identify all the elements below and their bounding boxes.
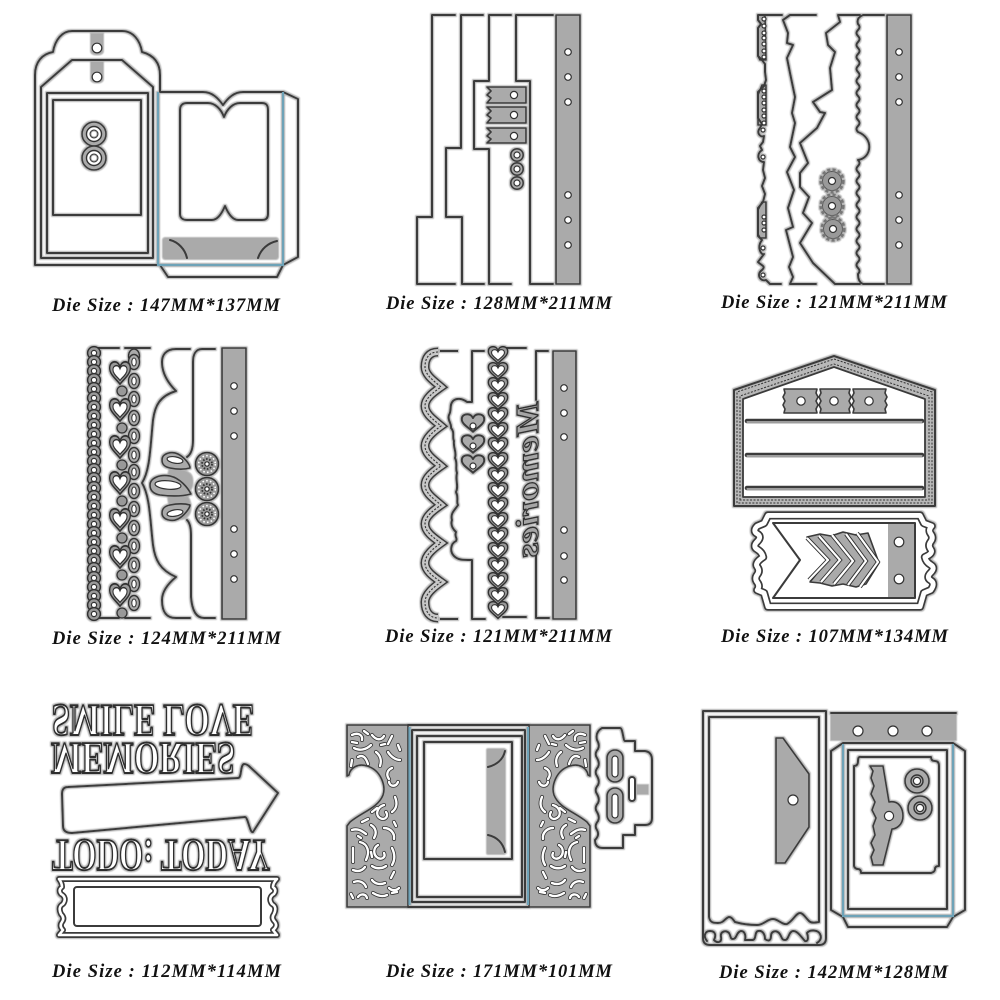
gears <box>821 170 844 240</box>
bead border <box>88 347 119 620</box>
panel: die set 1, tag and envelope <box>35 31 298 277</box>
deep torn strip <box>800 15 860 284</box>
panel: die set 7, mirrored words, arrow, ticket <box>51 695 278 935</box>
curved strip <box>142 349 190 618</box>
tall tag <box>703 711 826 945</box>
left filigree <box>347 725 408 907</box>
teardrop cluster <box>150 453 193 520</box>
chevrons <box>807 532 879 587</box>
caption 8: Die Size : 171MM*101MM <box>385 962 613 982</box>
tag frames <box>47 93 148 253</box>
rings <box>511 149 523 189</box>
stepped strips <box>417 15 455 284</box>
flap hole <box>788 795 798 805</box>
tag outline with envelope body <box>35 31 298 277</box>
caption 5: Die Size : 121MM*211MM <box>384 627 613 647</box>
ring pair <box>82 122 106 170</box>
panel: die set 5, scallops and hearts <box>425 347 576 619</box>
gray tab top <box>91 34 103 54</box>
slot bars <box>747 421 922 489</box>
ticket outline <box>755 515 933 607</box>
wavy strip <box>856 15 884 284</box>
caption 6: Die Size : 107MM*134MM <box>720 627 949 647</box>
heart chain <box>488 347 526 618</box>
gray hearts <box>462 414 484 473</box>
scallop strip <box>425 351 458 619</box>
envelope window <box>180 103 268 220</box>
banner tags <box>487 87 526 143</box>
panel: die set 4, lace strips <box>88 347 246 620</box>
dotted edge strip <box>758 15 782 284</box>
panel: die set 8, filigree gate card <box>347 725 652 907</box>
jagged gray piece <box>870 766 903 865</box>
bumpy strip <box>449 351 485 619</box>
gray strip with holes <box>556 15 580 284</box>
mirrored script word: Memories <box>509 401 545 558</box>
caption 4: Die Size : 124MM*211MM <box>51 629 282 649</box>
ticket <box>59 879 277 935</box>
gray tag flap <box>776 738 809 863</box>
rosettes <box>196 452 218 526</box>
torn strip <box>783 15 816 284</box>
word: memories: MEMORIES <box>51 733 235 783</box>
top strip <box>831 713 956 740</box>
scalloped window <box>854 757 939 873</box>
torn curls <box>705 930 821 943</box>
piece hole <box>884 811 894 821</box>
caption 2: Die Size : 128MM*211MM <box>385 294 613 314</box>
gray strip with holes <box>222 348 246 619</box>
right filigree <box>529 725 590 907</box>
blue fold lines <box>843 744 953 916</box>
inner frame <box>848 750 947 909</box>
panel: die set 2, stepped strips <box>417 15 580 284</box>
panel: die set 3, torn edge strips <box>758 15 911 284</box>
inner ticket frame <box>773 523 915 598</box>
gray tab lower <box>91 62 103 82</box>
caption 9: Die Size : 142MM*128MM <box>718 963 949 983</box>
inner tag <box>41 60 153 258</box>
ring pair <box>905 769 932 820</box>
side tab <box>595 728 652 848</box>
word: todo today: TODO: TODAY <box>52 830 270 880</box>
envelope <box>831 743 965 927</box>
stamp tabs <box>783 389 887 413</box>
caption 1: Die Size : 147MM*137MM <box>51 296 281 316</box>
arrow <box>62 764 278 833</box>
curved strip right <box>187 349 215 618</box>
caption 7: Die Size : 112MM*114MM <box>51 962 282 982</box>
gray strip with holes <box>887 15 911 284</box>
centre frames <box>408 725 529 907</box>
blue fold lines <box>158 92 283 265</box>
panel: die set 6, house tag and ticket <box>734 356 935 607</box>
heart lace border <box>110 348 150 618</box>
stitched house frame <box>734 356 935 506</box>
gray strip with corner slits <box>163 238 278 259</box>
bracket strip <box>536 351 549 618</box>
gray strip with holes <box>553 351 576 619</box>
caption 3: Die Size : 121MM*211MM <box>720 293 948 313</box>
word: smile love: SMILE LOVE <box>52 695 254 745</box>
panel: die set 9, tag and envelope <box>703 711 965 945</box>
